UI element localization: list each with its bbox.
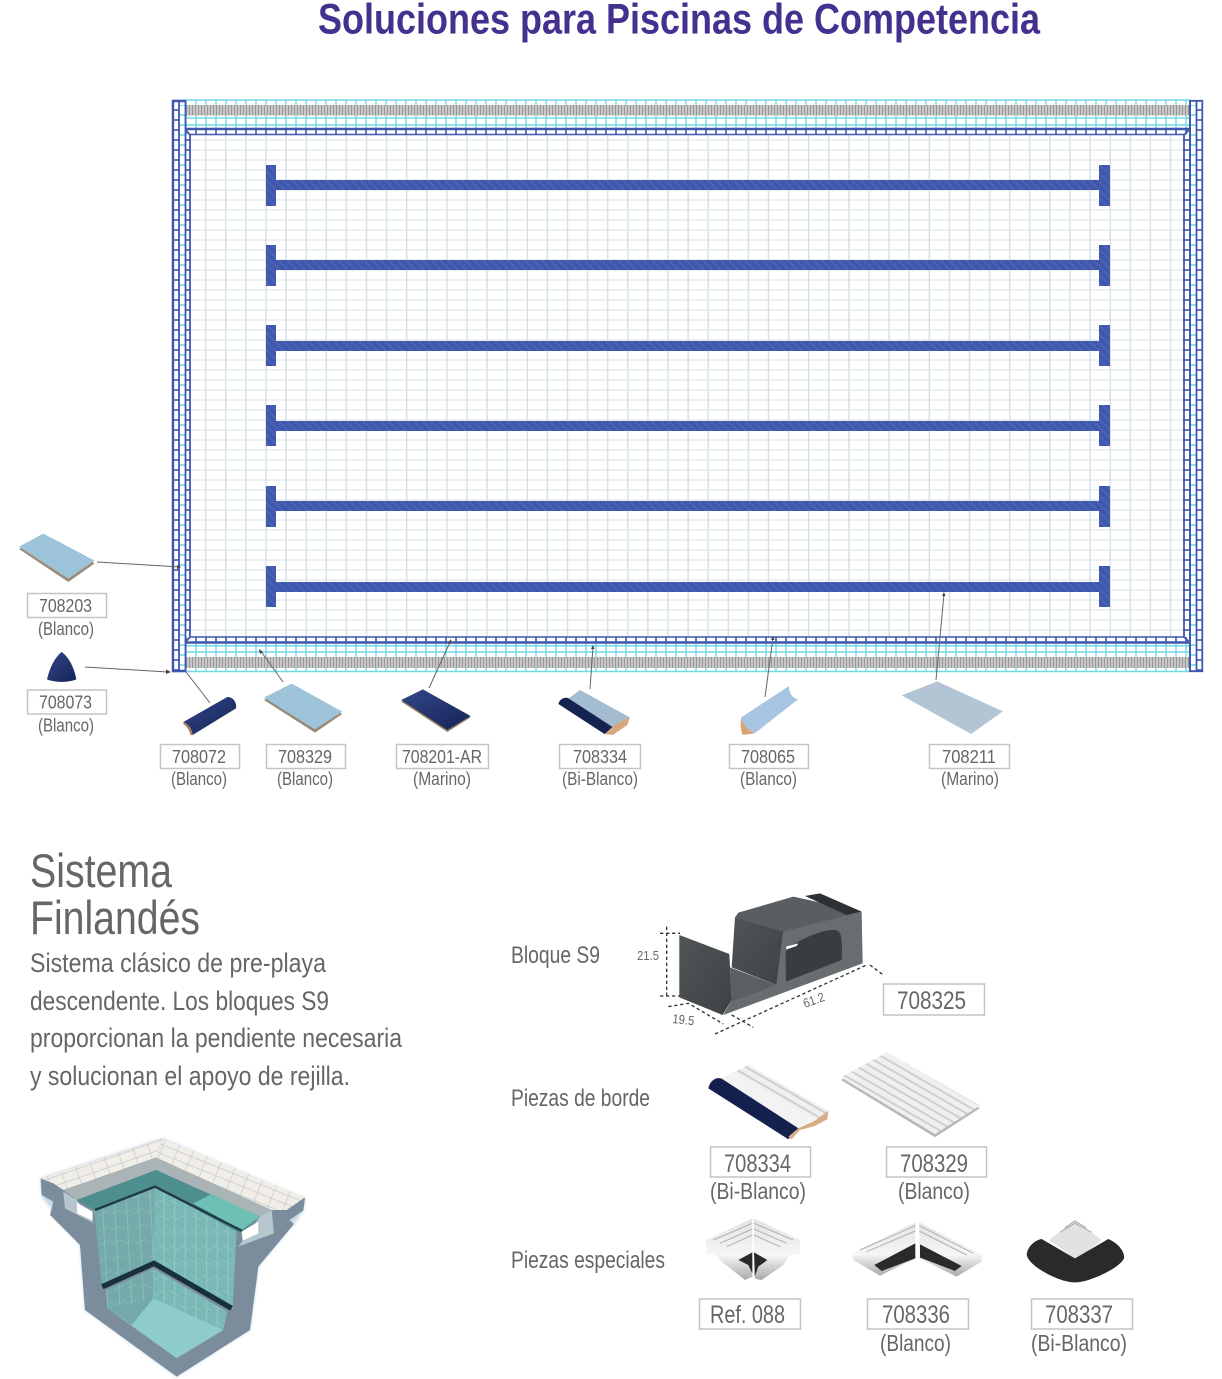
concrete body [41, 1138, 305, 1377]
label 708336: (Blanco) [880, 1330, 951, 1356]
icon: edge 708334 blue [558, 690, 630, 735]
description text: proporcionan la pendiente necesaria [30, 1023, 403, 1053]
label 708334 top [560, 744, 640, 789]
description text [30, 948, 403, 1091]
soft glow [41, 1138, 305, 1377]
label 708203 [28, 594, 106, 639]
bottom gutter band [186, 637, 1190, 672]
label 708203: 708203 [39, 596, 92, 616]
lane line 1 [266, 165, 1110, 206]
description text: y solucionan el apoyo de rejilla. [30, 1061, 350, 1091]
label 708334: (Bi-Blanco) [710, 1178, 806, 1204]
dimension values: 61.2 [801, 989, 827, 1011]
label 708211: 708211 [942, 747, 996, 767]
pool walls [94, 1187, 155, 1285]
icon: special 708337 [1027, 1220, 1124, 1282]
heading: Sistema Finlandés [30, 844, 200, 944]
icon: tile 708211 [902, 681, 1003, 734]
lane line 3 [266, 325, 1110, 366]
dimension values [637, 948, 827, 1028]
channels [63, 1192, 274, 1247]
description text: Sistema clásico de pre-playa [30, 948, 327, 978]
illustration: block S9 [660, 893, 883, 1034]
label 708329 white: (Blanco) [898, 1178, 970, 1204]
icon: tile 708203 [19, 534, 95, 582]
label: Piezas especiales: Piezas especiales [511, 1247, 665, 1274]
label 708334 top: (Bi-Blanco) [562, 769, 638, 789]
icon: edge 708072 [183, 697, 236, 735]
illustration: pool cross-section [41, 1138, 305, 1377]
pool floor [107, 1298, 223, 1358]
label 708201-AR: 708201-AR [402, 747, 482, 767]
water surface [77, 1170, 260, 1233]
label 708203: (Blanco) [38, 619, 94, 639]
label 708073: (Blanco) [38, 716, 94, 736]
left border column [172, 100, 190, 672]
pool floor grid [190, 135, 1184, 637]
leader lines [85, 562, 946, 703]
label 708334 [710, 1147, 810, 1204]
label 708329: (Blanco) [277, 769, 333, 789]
label 708329 [266, 744, 346, 789]
label 708336 [868, 1299, 968, 1356]
deck left [41, 1138, 163, 1190]
label 708211 [930, 744, 1010, 789]
heading: Sistema Finlandés: Finlandés [30, 891, 200, 944]
label 708065: (Blanco) [740, 769, 797, 789]
pool plan [172, 100, 1203, 672]
lane line 5 [266, 486, 1110, 527]
icon: tile 708329 [264, 684, 342, 733]
label 708072 [160, 744, 240, 789]
grating [63, 1157, 272, 1217]
label 708337: 708337 [1045, 1301, 1113, 1329]
lane line 6 [266, 566, 1110, 607]
label 708065: 708065 [741, 747, 795, 767]
label 708072: (Blanco) [171, 769, 227, 789]
label 708201-AR [396, 744, 488, 789]
top gutter band [186, 100, 1190, 134]
icon: edge 708334 [708, 1065, 828, 1139]
icon: tile 708201-AR [401, 689, 471, 732]
icon: special 088 [706, 1218, 800, 1280]
label 708329 white [886, 1147, 986, 1204]
label 708201-AR: (Marino) [413, 769, 471, 789]
right border column [1184, 100, 1203, 672]
label 708072: 708072 [172, 747, 226, 767]
label 708337 [1031, 1299, 1132, 1356]
icon: tile 708329 white [841, 1052, 980, 1137]
label 708334 top: 708334 [573, 747, 627, 767]
label 708329 white: 708329 [900, 1150, 968, 1178]
description text: descendente. Los bloques S9 [30, 986, 329, 1016]
label Ref. 088: Ref. 088 [710, 1301, 785, 1329]
icon: special 708336 [852, 1222, 983, 1277]
icon: corner 708073 [47, 652, 76, 682]
deck right [156, 1138, 305, 1210]
label: Bloque S9: Bloque S9 [511, 942, 600, 969]
label 708073 [28, 690, 106, 736]
lane line 2 [266, 245, 1110, 286]
label: Piezas de borde: Piezas de borde [511, 1085, 650, 1112]
dimension values: 19.5 [672, 1011, 695, 1028]
label 708336: 708336 [882, 1301, 950, 1329]
label 708211: (Marino) [941, 769, 999, 789]
heading: Sistema Finlandés: Sistema [30, 844, 173, 897]
label 708325: 708325 [897, 987, 966, 1015]
lane line 4 [266, 405, 1110, 446]
label 708329: 708329 [278, 747, 332, 767]
label 708065 [730, 744, 808, 789]
label 708334: 708334 [724, 1150, 791, 1178]
label 708073: 708073 [39, 692, 92, 712]
dimension values: 21.5 [637, 948, 659, 963]
icon: cove 708065 [741, 686, 798, 735]
dimension lines [660, 927, 883, 1034]
label 708337: (Bi-Blanco) [1031, 1330, 1127, 1356]
